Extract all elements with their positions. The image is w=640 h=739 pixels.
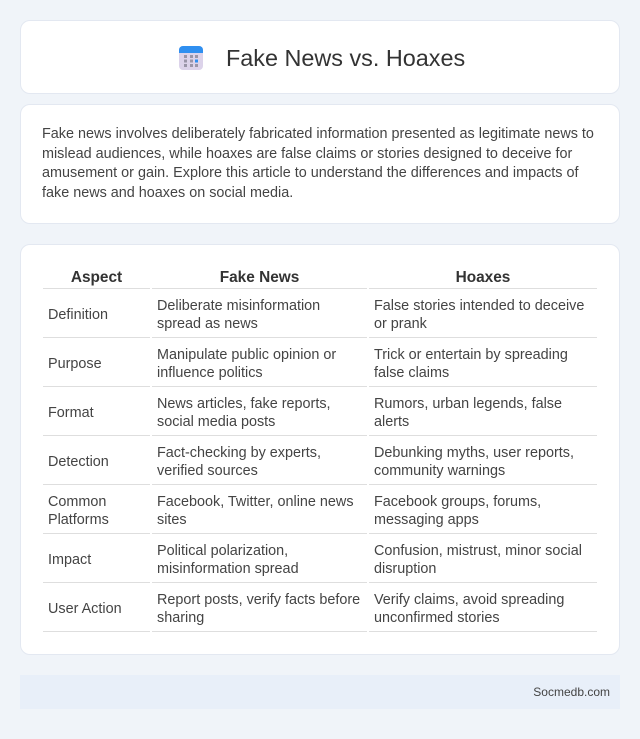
table	[43, 269, 597, 632]
Platforms: hoaxes: Facebook groups, forums,	[374, 494, 541, 510]
Platforms: hoaxes: messaging apps	[374, 512, 479, 528]
Definition: fake news	[157, 298, 320, 332]
Platforms: fake news: sites	[157, 512, 187, 528]
footer bar	[20, 675, 620, 709]
Impact: hoaxes	[374, 543, 582, 577]
Definition: fake news: Deliberate misinformation	[157, 298, 320, 314]
title: Fake News vs. Hoaxes	[226, 45, 465, 71]
Impact: fake news	[157, 543, 299, 577]
Detection: fake news	[157, 445, 321, 479]
header: Fake News: Fake News	[220, 269, 299, 286]
Platforms: hoaxes	[374, 494, 541, 528]
header: Aspect: Aspect	[71, 269, 122, 286]
Format: fake news	[157, 396, 331, 430]
row: Format: Format	[48, 405, 94, 421]
Impact: fake news: misinformation spread	[157, 561, 299, 577]
User Action: hoaxes	[374, 592, 564, 626]
row: Definition: Definition	[48, 307, 108, 323]
intro text	[42, 126, 594, 200]
Format: hoaxes	[374, 396, 562, 430]
Platforms: fake news	[157, 494, 354, 528]
header: Hoaxes: Hoaxes	[456, 269, 510, 286]
Platforms: fake news: Facebook, Twitter, online news	[157, 494, 354, 510]
Detection: hoaxes: community warnings	[374, 463, 505, 479]
Definition: hoaxes: or prank	[374, 316, 427, 332]
Definition: hoaxes: False stories intended to deceive	[374, 298, 584, 314]
Purpose: hoaxes: false claims	[374, 365, 449, 381]
User Action: fake news: sharing	[157, 610, 204, 626]
User Action: fake news	[157, 592, 360, 626]
intro text: Fake news involves deliberately fabricated information presented as legitimate news to	[42, 126, 594, 142]
Purpose: fake news: influence politics	[157, 365, 263, 381]
row: Common Platforms	[48, 494, 109, 528]
intro text: mislead audiences, while hoaxes are false claims or stories designed to deceive for	[42, 146, 572, 162]
Purpose: fake news	[157, 347, 336, 381]
User Action: hoaxes: unconfirmed stories	[374, 610, 500, 626]
User Action: hoaxes: Verify claims, avoid spreading	[374, 592, 564, 608]
Impact: hoaxes: Confusion, mistrust, minor social	[374, 543, 582, 559]
Detection: hoaxes: Debunking myths, user reports,	[374, 445, 574, 461]
intro text: amusement or gain. Explore this article to understand the differences and impacts of	[42, 165, 578, 181]
row: Common Platforms: Platforms	[48, 512, 109, 528]
Detection: hoaxes	[374, 445, 574, 479]
row: Common Platforms: Common	[48, 494, 106, 510]
Format: fake news: social media posts	[157, 414, 275, 430]
Detection: fake news: Fact-checking by experts,	[157, 445, 321, 461]
row: User Action: User Action	[48, 601, 122, 617]
intro text: fake news and hoaxes on social media.	[42, 184, 293, 200]
Definition: hoaxes	[374, 298, 584, 332]
row: Impact: Impact	[48, 552, 91, 568]
Impact: hoaxes: disruption	[374, 561, 436, 577]
title card	[20, 20, 620, 94]
Purpose: fake news: Manipulate public opinion or	[157, 347, 336, 363]
row: Purpose: Purpose	[48, 356, 102, 372]
Purpose: hoaxes	[374, 347, 568, 381]
icon: calendar	[179, 46, 203, 70]
footer text: Socmedb.com	[533, 685, 610, 699]
Format: hoaxes: Rumors, urban legends, false	[374, 396, 562, 412]
Format: fake news: News articles, fake reports,	[157, 396, 331, 412]
Purpose: hoaxes: Trick or entertain by spreading	[374, 347, 568, 363]
User Action: fake news: Report posts, verify facts before	[157, 592, 360, 608]
Impact: fake news: Political polarization,	[157, 543, 288, 559]
Definition: fake news: spread as news	[157, 316, 258, 332]
table card	[20, 244, 620, 655]
intro card	[20, 104, 620, 224]
row: Detection: Detection	[48, 454, 109, 470]
Detection: fake news: verified sources	[157, 463, 258, 479]
Format: hoaxes: alerts	[374, 414, 409, 430]
